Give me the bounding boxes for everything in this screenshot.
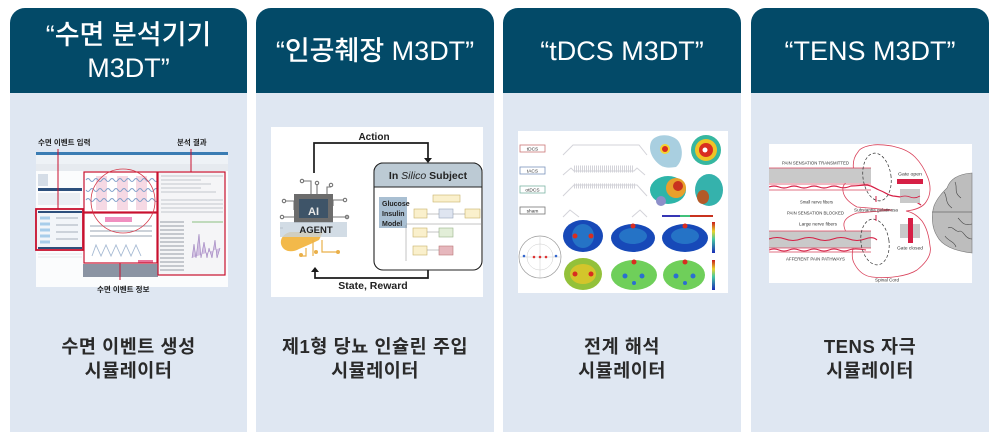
- label: analysis result: 분석 결과: [177, 137, 207, 147]
- icon: AI agent chip: AI: [308, 206, 319, 218]
- glucose insulin model: Insulin: [382, 211, 405, 218]
- diagram labels: Gate open: [898, 172, 923, 176]
- stimulation labels: sham: [527, 208, 538, 214]
- heading: artificial pancreas: [256, 8, 494, 93]
- red highlight boxes: [36, 149, 225, 280]
- panel: TENS: [751, 8, 989, 432]
- stimulation labels: [520, 145, 545, 214]
- nerve fibers: [769, 168, 921, 252]
- caption: insulin simulator: [282, 336, 468, 381]
- glucose insulin model: Model: [382, 221, 402, 228]
- heading: TENS: [751, 8, 989, 93]
- icon: AI agent chip: AGENT: [299, 225, 333, 236]
- label: action: Action: [358, 132, 390, 143]
- diagram labels: Small nerve fibers: [800, 200, 833, 204]
- diagram labels: Gate closed: [897, 246, 924, 250]
- EEG signal panel: [84, 172, 158, 212]
- brain maps: top row: [563, 220, 708, 252]
- diagram labels: Large nerve fibers: [799, 222, 837, 226]
- in silico subject box: [374, 163, 482, 270]
- label: state, reward: State, Reward: [338, 280, 408, 292]
- in silico subject box: In Silico Subject: [389, 170, 468, 182]
- heading: tDCS: “tDCS M3DT”: [540, 36, 704, 66]
- heading: sleep analyzer: [10, 8, 247, 93]
- panel: tDCS: [503, 8, 741, 432]
- diagram labels: Spinal Cord: [875, 278, 900, 282]
- caption: TENS simulator: TENS 자극: [824, 336, 916, 357]
- caption: sleep event simulator: 시뮬레이터: [85, 360, 172, 381]
- heading: sleep analyzer: M3DT”: [87, 52, 170, 82]
- diagram labels: PAIN SENSATION TRANSMITTED: [782, 160, 849, 166]
- caption: field analysis simulator: [578, 336, 666, 381]
- diagram labels: AFFERENT PAIN PATHWAYS: [786, 256, 845, 262]
- colour bars: [712, 222, 715, 290]
- heading: tDCS: [503, 8, 741, 93]
- caption: insulin simulator: 제1형 당뇨 인슐린 주입: [282, 336, 468, 357]
- figure: TENS gate control diagram: [769, 144, 972, 283]
- diagram labels: PAIN SENSATION BLOCKED: [787, 210, 844, 216]
- label: sleep event information: 수면 이벤트 정보: [97, 284, 150, 294]
- stimulation labels: tDCS: [527, 146, 538, 152]
- diagram labels: Substantia gelatinosa: [854, 208, 899, 212]
- figure: reinforcement learning loop: [271, 127, 483, 297]
- head models: [650, 135, 723, 206]
- figure: tDCS waveforms and brain maps: [518, 131, 728, 293]
- stimulation waveforms: [563, 145, 647, 217]
- caption: sleep event simulator: 수면 이벤트 생성: [61, 336, 196, 357]
- spinal cord outline: [843, 145, 930, 278]
- arrow: action: [314, 143, 432, 173]
- caption: sleep event simulator: [61, 336, 196, 381]
- label: sleep event input: 수면 이벤트 입력: [38, 137, 91, 147]
- glucose insulin model: [379, 195, 482, 261]
- gate symbols: [876, 179, 923, 243]
- caption: TENS simulator: [824, 336, 916, 381]
- heading: artificial pancreas: “인공췌장 M3DT”: [276, 36, 474, 66]
- caption: insulin simulator: 시뮬레이터: [331, 360, 419, 381]
- caption: TENS simulator: 시뮬레이터: [826, 360, 914, 381]
- panel: sleep analyzer: [10, 8, 247, 432]
- glucose insulin model: Glucose: [382, 201, 410, 208]
- icon: AI agent chip: [280, 179, 349, 257]
- analysis results panel: [160, 176, 223, 270]
- dashed gates: [858, 151, 894, 267]
- panel: artificial pancreas: [256, 8, 494, 432]
- diagram labels: [782, 160, 924, 282]
- heading: sleep analyzer: “수면 분석기기: [46, 20, 211, 50]
- event input panel: [37, 210, 83, 249]
- heading: TENS: “TENS M3DT”: [784, 36, 956, 66]
- icon: brain: [932, 173, 972, 253]
- colour legend: [662, 215, 713, 217]
- EEG electrode map: [519, 236, 561, 278]
- event info panel: [84, 213, 157, 263]
- stimulation labels: tACS: [527, 168, 538, 174]
- caption: field analysis simulator: 전계 해석: [584, 336, 660, 357]
- figure: sleep software screenshot: [35, 137, 228, 294]
- brain maps: bottom row: [564, 258, 705, 290]
- arrow: state, reward: [311, 267, 428, 278]
- stimulation labels: otDCS: [525, 188, 540, 194]
- software window: [36, 152, 228, 287]
- caption: field analysis simulator: 시뮬레이터: [578, 360, 666, 381]
